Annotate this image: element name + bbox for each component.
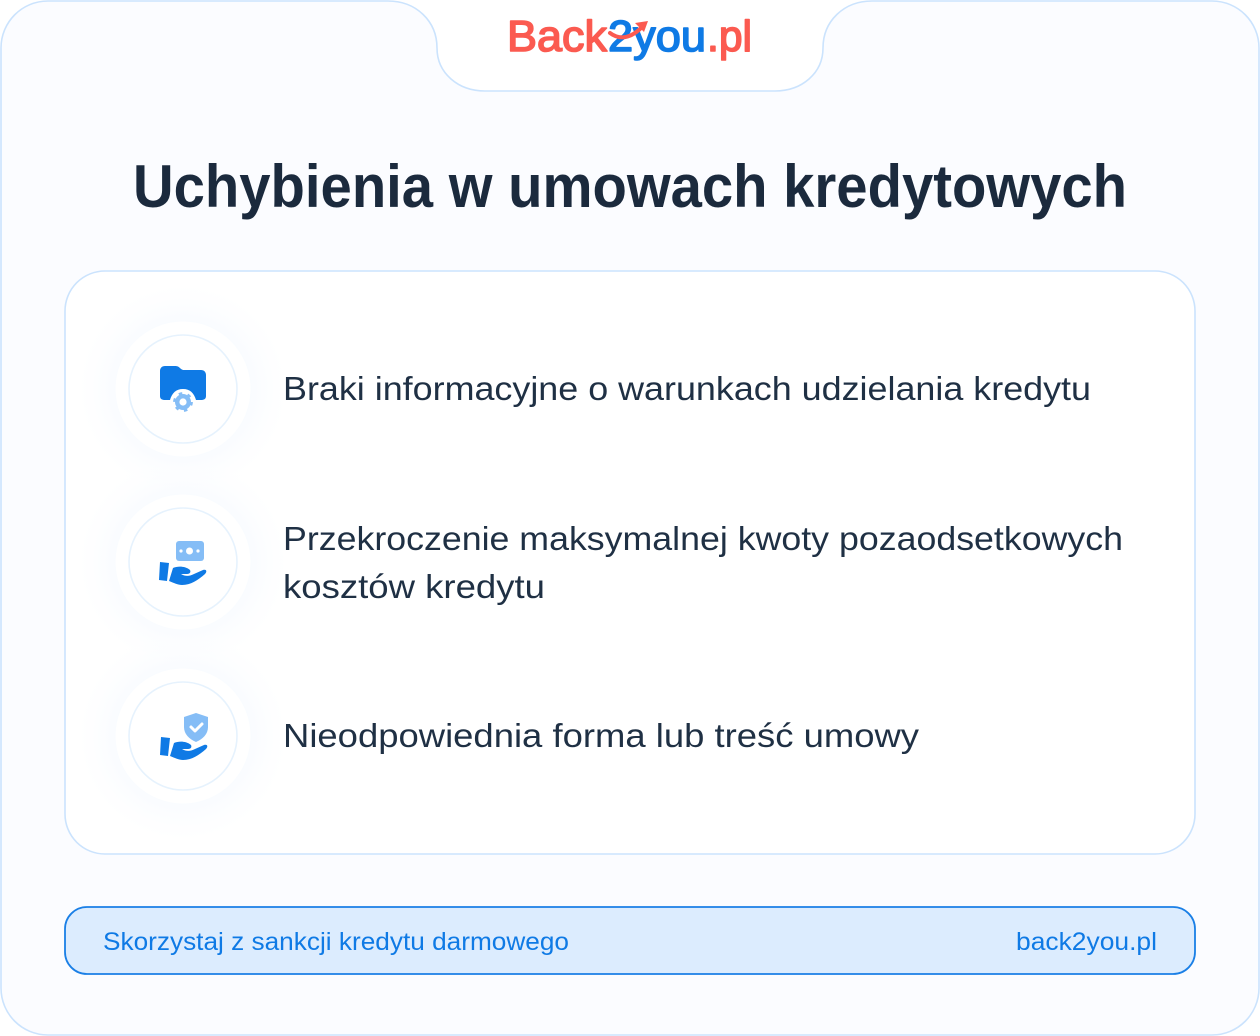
panel: list of deficiencies (65, 271, 1195, 854)
logo (507, 12, 752, 61)
icon: folder with gear (78, 284, 288, 494)
icon: hand with banknote (78, 457, 288, 667)
icon: logo arrow (610, 25, 644, 37)
logo: Back (507, 12, 608, 61)
text: item 1: Braki informacyjne o warunkach udzielania kredytu (283, 370, 1091, 407)
text: item 3: Nieodpowiednia forma lub treść umowy (283, 717, 920, 754)
text: item 2: kosztów kredytu (283, 568, 545, 605)
title: Uchybienia w umowach kredytowych (133, 153, 1127, 220)
footer text left: Skorzystaj z sankcji kredytu darmowego (103, 928, 569, 956)
footer text right: back2you.pl (1016, 928, 1157, 956)
logo: .pl (707, 12, 752, 61)
text: item 2 (283, 520, 1123, 605)
icon: hand with shield (78, 631, 288, 841)
text: item 2: Przekroczenie maksymalnej kwoty pozaodsetkowych (283, 520, 1123, 557)
footer bar (65, 907, 1195, 974)
logo: 2you (608, 12, 706, 61)
item 2 (78, 457, 1123, 667)
item 3 (78, 631, 920, 841)
item 1 (78, 284, 1091, 494)
